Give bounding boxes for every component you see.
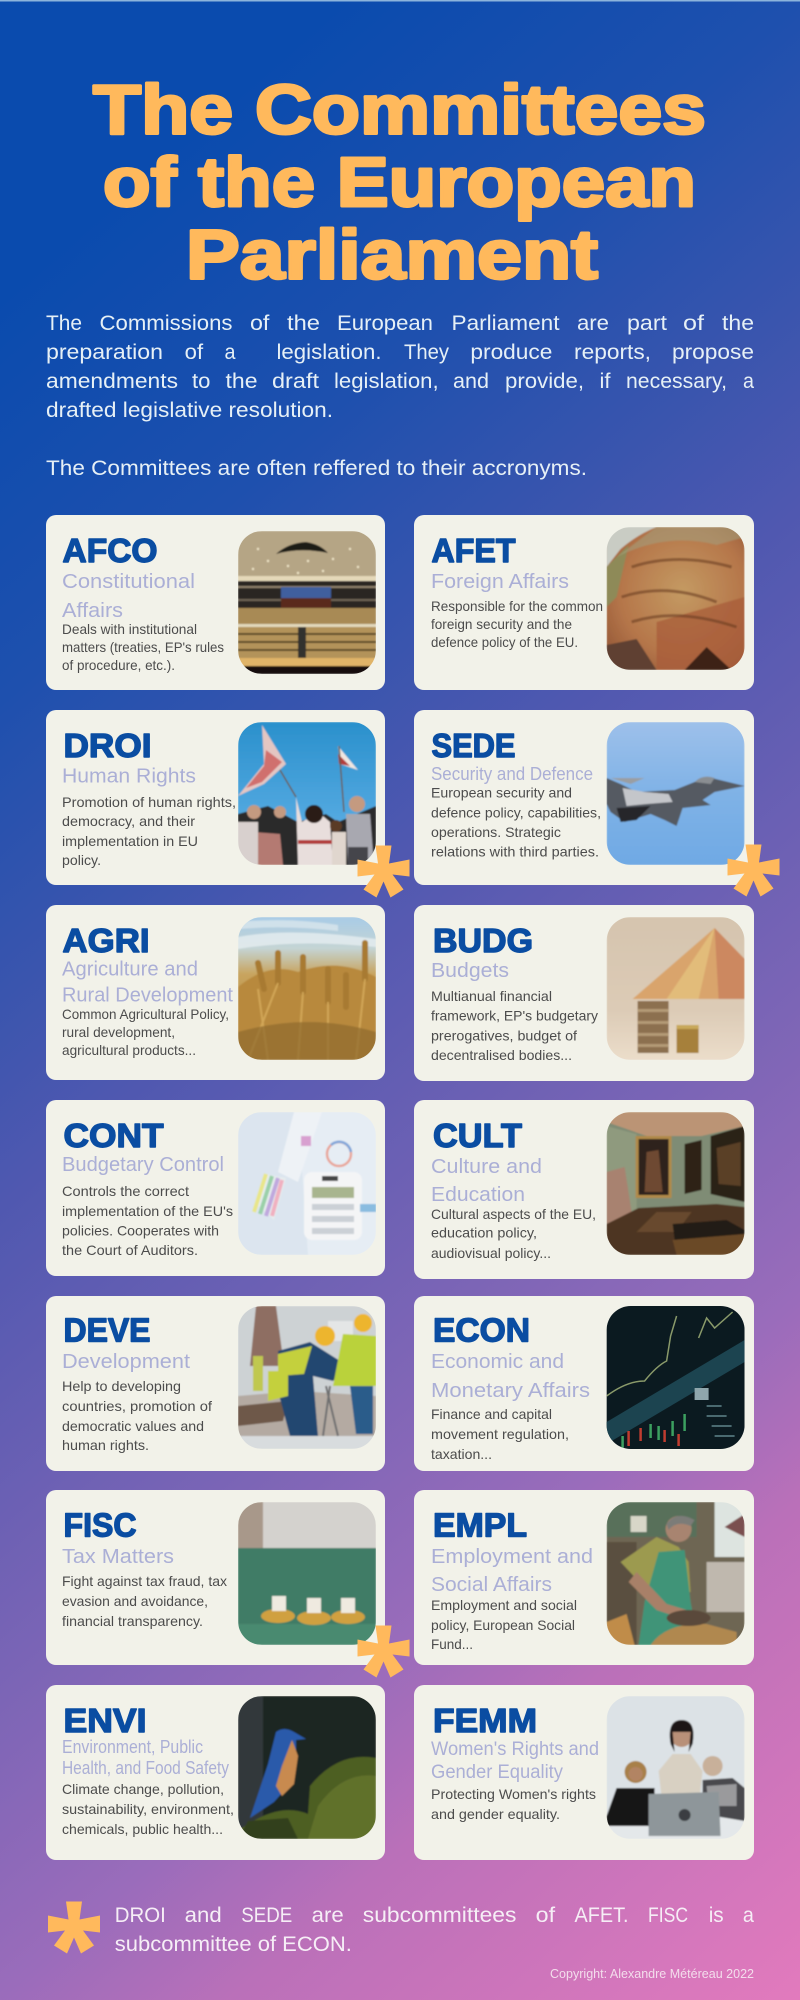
committee name: Human Rights bbox=[62, 765, 196, 788]
photo: globe map bbox=[607, 527, 745, 670]
committee name bbox=[62, 570, 195, 622]
description: Help to developing bbox=[62, 1378, 181, 1394]
committee name: Budgetary Control bbox=[62, 1153, 224, 1176]
acronym: CULT bbox=[433, 1118, 523, 1155]
panel: CULT bbox=[414, 1100, 754, 1279]
footnote asterisk bbox=[48, 1902, 100, 1954]
panel: FISC bbox=[46, 1490, 410, 1678]
description: sustainability, environment, bbox=[62, 1801, 234, 1817]
intro text: to bbox=[192, 370, 210, 393]
title: The Committees bbox=[93, 70, 706, 148]
panel: ENVI bbox=[46, 1685, 385, 1860]
committee name: Development bbox=[62, 1350, 190, 1373]
asterisk note marker bbox=[358, 1626, 410, 1678]
intro text: reports, bbox=[574, 341, 651, 364]
committee name: Agriculture and bbox=[62, 958, 198, 981]
panel: DEVE bbox=[46, 1296, 385, 1471]
description: Climate change, pollution, bbox=[62, 1781, 224, 1797]
acronym: CONT bbox=[64, 1118, 164, 1155]
description: education policy, bbox=[431, 1225, 537, 1241]
intro text: and bbox=[453, 370, 489, 393]
description: policies. Cooperates with bbox=[62, 1223, 219, 1239]
description: audiovisual policy... bbox=[431, 1245, 551, 1261]
description: chemicals, public health... bbox=[62, 1821, 223, 1837]
intro text: drafted legislative resolution. bbox=[46, 399, 333, 422]
photo: demonstrators with flags bbox=[238, 722, 376, 865]
footnote text: and bbox=[185, 1904, 222, 1927]
description: Finance and capital bbox=[431, 1406, 552, 1422]
description: evasion and avoidance, bbox=[62, 1593, 208, 1609]
acronym: DROI bbox=[64, 728, 152, 765]
description: defence policy, capabilities, bbox=[431, 805, 601, 821]
committee name: Health, and Food Safety bbox=[62, 1758, 229, 1778]
intro text: legislation. bbox=[276, 341, 382, 364]
intro text: the bbox=[722, 312, 754, 335]
photo: craftsman at work bbox=[607, 1502, 745, 1645]
asterisk note marker bbox=[358, 846, 410, 898]
description: the Court of Auditors. bbox=[62, 1242, 198, 1258]
photo: coins and banknote house bbox=[607, 917, 745, 1060]
footnote text: subcommittees bbox=[363, 1904, 516, 1927]
description bbox=[62, 1573, 227, 1629]
panel: EMPL bbox=[414, 1490, 754, 1665]
footnote text: is bbox=[709, 1904, 724, 1927]
panel: ECON bbox=[414, 1296, 754, 1471]
acronym: ECON bbox=[433, 1313, 530, 1350]
intro text: preparation bbox=[46, 341, 163, 364]
panel: FEMM bbox=[414, 1685, 754, 1860]
description bbox=[431, 988, 598, 1063]
description: Multianual financial bbox=[431, 988, 552, 1004]
intro text bbox=[46, 312, 754, 480]
committee name: Economic and bbox=[431, 1350, 564, 1373]
description bbox=[431, 1597, 577, 1652]
intro text: necessary, bbox=[626, 370, 727, 393]
photo: construction workers bbox=[238, 1306, 376, 1449]
committee name: Budgets bbox=[431, 959, 509, 982]
description: policy, European Social bbox=[431, 1617, 575, 1633]
description bbox=[62, 621, 224, 673]
photo: fighter jet bbox=[607, 722, 745, 865]
description: policy. bbox=[62, 852, 101, 868]
description: Responsible for the common bbox=[431, 598, 603, 614]
description: Protecting Women's rights bbox=[431, 1786, 596, 1802]
intro text: The bbox=[46, 312, 82, 335]
description: foreign security and the bbox=[431, 616, 572, 632]
description: taxation... bbox=[431, 1446, 492, 1462]
intro text: of bbox=[250, 312, 270, 335]
description: and gender equality. bbox=[431, 1806, 560, 1822]
committee name: Social Affairs bbox=[431, 1573, 552, 1596]
committee name: Women's Rights and bbox=[431, 1739, 599, 1760]
description bbox=[62, 1006, 229, 1058]
footnote text: DROI bbox=[115, 1904, 166, 1927]
description: defence policy of the EU. bbox=[431, 634, 578, 650]
footnote text bbox=[115, 1904, 754, 1956]
footnote text: of bbox=[536, 1904, 555, 1927]
panel: DROI bbox=[46, 710, 410, 898]
description: operations. Strategic bbox=[431, 824, 561, 840]
acronym: DEVE bbox=[64, 1313, 150, 1350]
committee name: Environment, Public bbox=[62, 1737, 203, 1757]
description: relations with third parties. bbox=[431, 844, 599, 860]
description bbox=[62, 1781, 234, 1837]
photo: wheat field bbox=[238, 917, 376, 1060]
intro text: provide, bbox=[505, 370, 584, 393]
committee name: Affairs bbox=[62, 599, 123, 622]
committee name bbox=[431, 1155, 542, 1206]
footnote text: AFET. bbox=[574, 1904, 628, 1927]
committee name: Security and Defence bbox=[431, 764, 593, 784]
description: implementation of the EU's bbox=[62, 1203, 233, 1219]
footnote text: SEDE bbox=[241, 1904, 292, 1927]
intro text: of bbox=[683, 312, 704, 335]
committee name: Rural Development bbox=[62, 984, 233, 1007]
intro text: draft bbox=[272, 370, 319, 393]
intro text: the bbox=[287, 312, 320, 335]
description: democracy, and their bbox=[62, 813, 195, 829]
committee name bbox=[431, 1739, 599, 1783]
description: Promotion of human rights, bbox=[62, 794, 236, 810]
description: European security and bbox=[431, 785, 572, 801]
intro text: the bbox=[226, 370, 258, 393]
acronym: EMPL bbox=[433, 1508, 527, 1545]
intro text: The Committees are often reffered to their accronyms. bbox=[46, 457, 587, 480]
description: democratic values and bbox=[62, 1418, 204, 1434]
description bbox=[62, 1378, 212, 1453]
footnote text: subcommittee of ECON. bbox=[115, 1933, 352, 1956]
panel: SEDE bbox=[414, 710, 780, 896]
panel: CONT bbox=[46, 1100, 385, 1276]
panel: AFCO bbox=[46, 515, 385, 690]
committee name: Constitutional bbox=[62, 570, 195, 593]
photo: tax coins bbox=[238, 1502, 376, 1645]
photo: three women with laptop bbox=[607, 1696, 745, 1839]
acronym: AFET bbox=[432, 533, 516, 570]
committee name: Culture and bbox=[431, 1155, 542, 1178]
photo: art gallery bbox=[607, 1112, 745, 1255]
photo: stock chart bbox=[607, 1306, 745, 1449]
acronym: SEDE bbox=[432, 728, 516, 765]
intro text: They bbox=[404, 341, 449, 364]
description: countries, promotion of bbox=[62, 1398, 212, 1414]
copyright: Copyright: Alexandre Météreau 2022 bbox=[550, 1966, 754, 1981]
intro text: if bbox=[600, 370, 611, 393]
description: financial transparency. bbox=[62, 1613, 203, 1629]
intro text: a bbox=[224, 341, 236, 364]
description: Employment and social bbox=[431, 1597, 577, 1613]
acronym: FEMM bbox=[433, 1703, 537, 1740]
description: Fund... bbox=[431, 1636, 473, 1652]
photo: calculator and charts bbox=[238, 1112, 376, 1255]
panel: AFET bbox=[414, 515, 754, 690]
intro text: produce bbox=[470, 341, 552, 364]
description bbox=[431, 1786, 596, 1822]
description bbox=[62, 1183, 233, 1258]
committee name: Foreign Affairs bbox=[431, 570, 569, 593]
intro text: amendments bbox=[46, 370, 178, 393]
title: Parliament bbox=[186, 216, 598, 294]
description: movement regulation, bbox=[431, 1426, 569, 1442]
description: Common Agricultural Policy, bbox=[62, 1006, 229, 1022]
description: decentralised bodies... bbox=[431, 1047, 572, 1063]
committee name: Education bbox=[431, 1183, 525, 1206]
description: rural development, bbox=[62, 1024, 175, 1040]
description bbox=[431, 785, 601, 860]
intro text: part bbox=[627, 312, 667, 335]
footnote text: are bbox=[312, 1904, 344, 1927]
intro text: of bbox=[185, 341, 203, 364]
intro text: European bbox=[337, 312, 433, 335]
acronym: AGRI bbox=[62, 923, 150, 960]
intro text: Commissions bbox=[100, 312, 232, 335]
description: of procedure, etc.). bbox=[62, 657, 175, 673]
description bbox=[431, 1406, 569, 1462]
footnote text: a bbox=[743, 1904, 754, 1927]
committee name bbox=[62, 1737, 229, 1778]
photo: bluebird on moss bbox=[238, 1696, 376, 1839]
description: Controls the correct bbox=[62, 1183, 189, 1199]
asterisk note marker bbox=[728, 844, 780, 896]
committee name bbox=[62, 958, 233, 1007]
description bbox=[62, 794, 236, 868]
title bbox=[93, 70, 706, 294]
title: of the European bbox=[103, 143, 696, 221]
footnote text: FISC bbox=[648, 1904, 688, 1927]
description bbox=[431, 598, 603, 650]
committee name bbox=[431, 1350, 590, 1402]
description: Deals with institutional bbox=[62, 621, 197, 637]
description: matters (treaties, EP's rules bbox=[62, 639, 224, 655]
intro text: propose bbox=[672, 341, 754, 364]
description: prerogatives, budget of bbox=[431, 1028, 577, 1044]
committee name: Employment and bbox=[431, 1545, 593, 1568]
acronym: ENVI bbox=[64, 1703, 146, 1740]
panel: AGRI bbox=[46, 905, 385, 1080]
committee name: Tax Matters bbox=[62, 1545, 174, 1568]
acronym: FISC bbox=[64, 1508, 136, 1545]
committee name: Monetary Affairs bbox=[431, 1379, 590, 1402]
description: framework, EP's budgetary bbox=[431, 1008, 598, 1024]
description: human rights. bbox=[62, 1437, 149, 1453]
photo: parliament hemicycle bbox=[238, 531, 376, 674]
description: Fight against tax fraud, tax bbox=[62, 1573, 227, 1589]
intro text: are bbox=[577, 312, 609, 335]
description: agricultural products... bbox=[62, 1042, 196, 1058]
acronym: BUDG bbox=[433, 923, 533, 960]
panel: BUDG bbox=[414, 905, 754, 1081]
intro text: Parliament bbox=[452, 312, 560, 335]
description: Cultural aspects of the EU, bbox=[431, 1206, 596, 1222]
intro text: legislation, bbox=[334, 370, 439, 393]
description bbox=[431, 1206, 596, 1261]
acronym: AFCO bbox=[62, 533, 158, 570]
committee name bbox=[431, 1545, 593, 1596]
committee name: Gender Equality bbox=[431, 1762, 563, 1783]
intro text: a bbox=[743, 370, 754, 393]
description: implementation in EU bbox=[62, 833, 198, 849]
